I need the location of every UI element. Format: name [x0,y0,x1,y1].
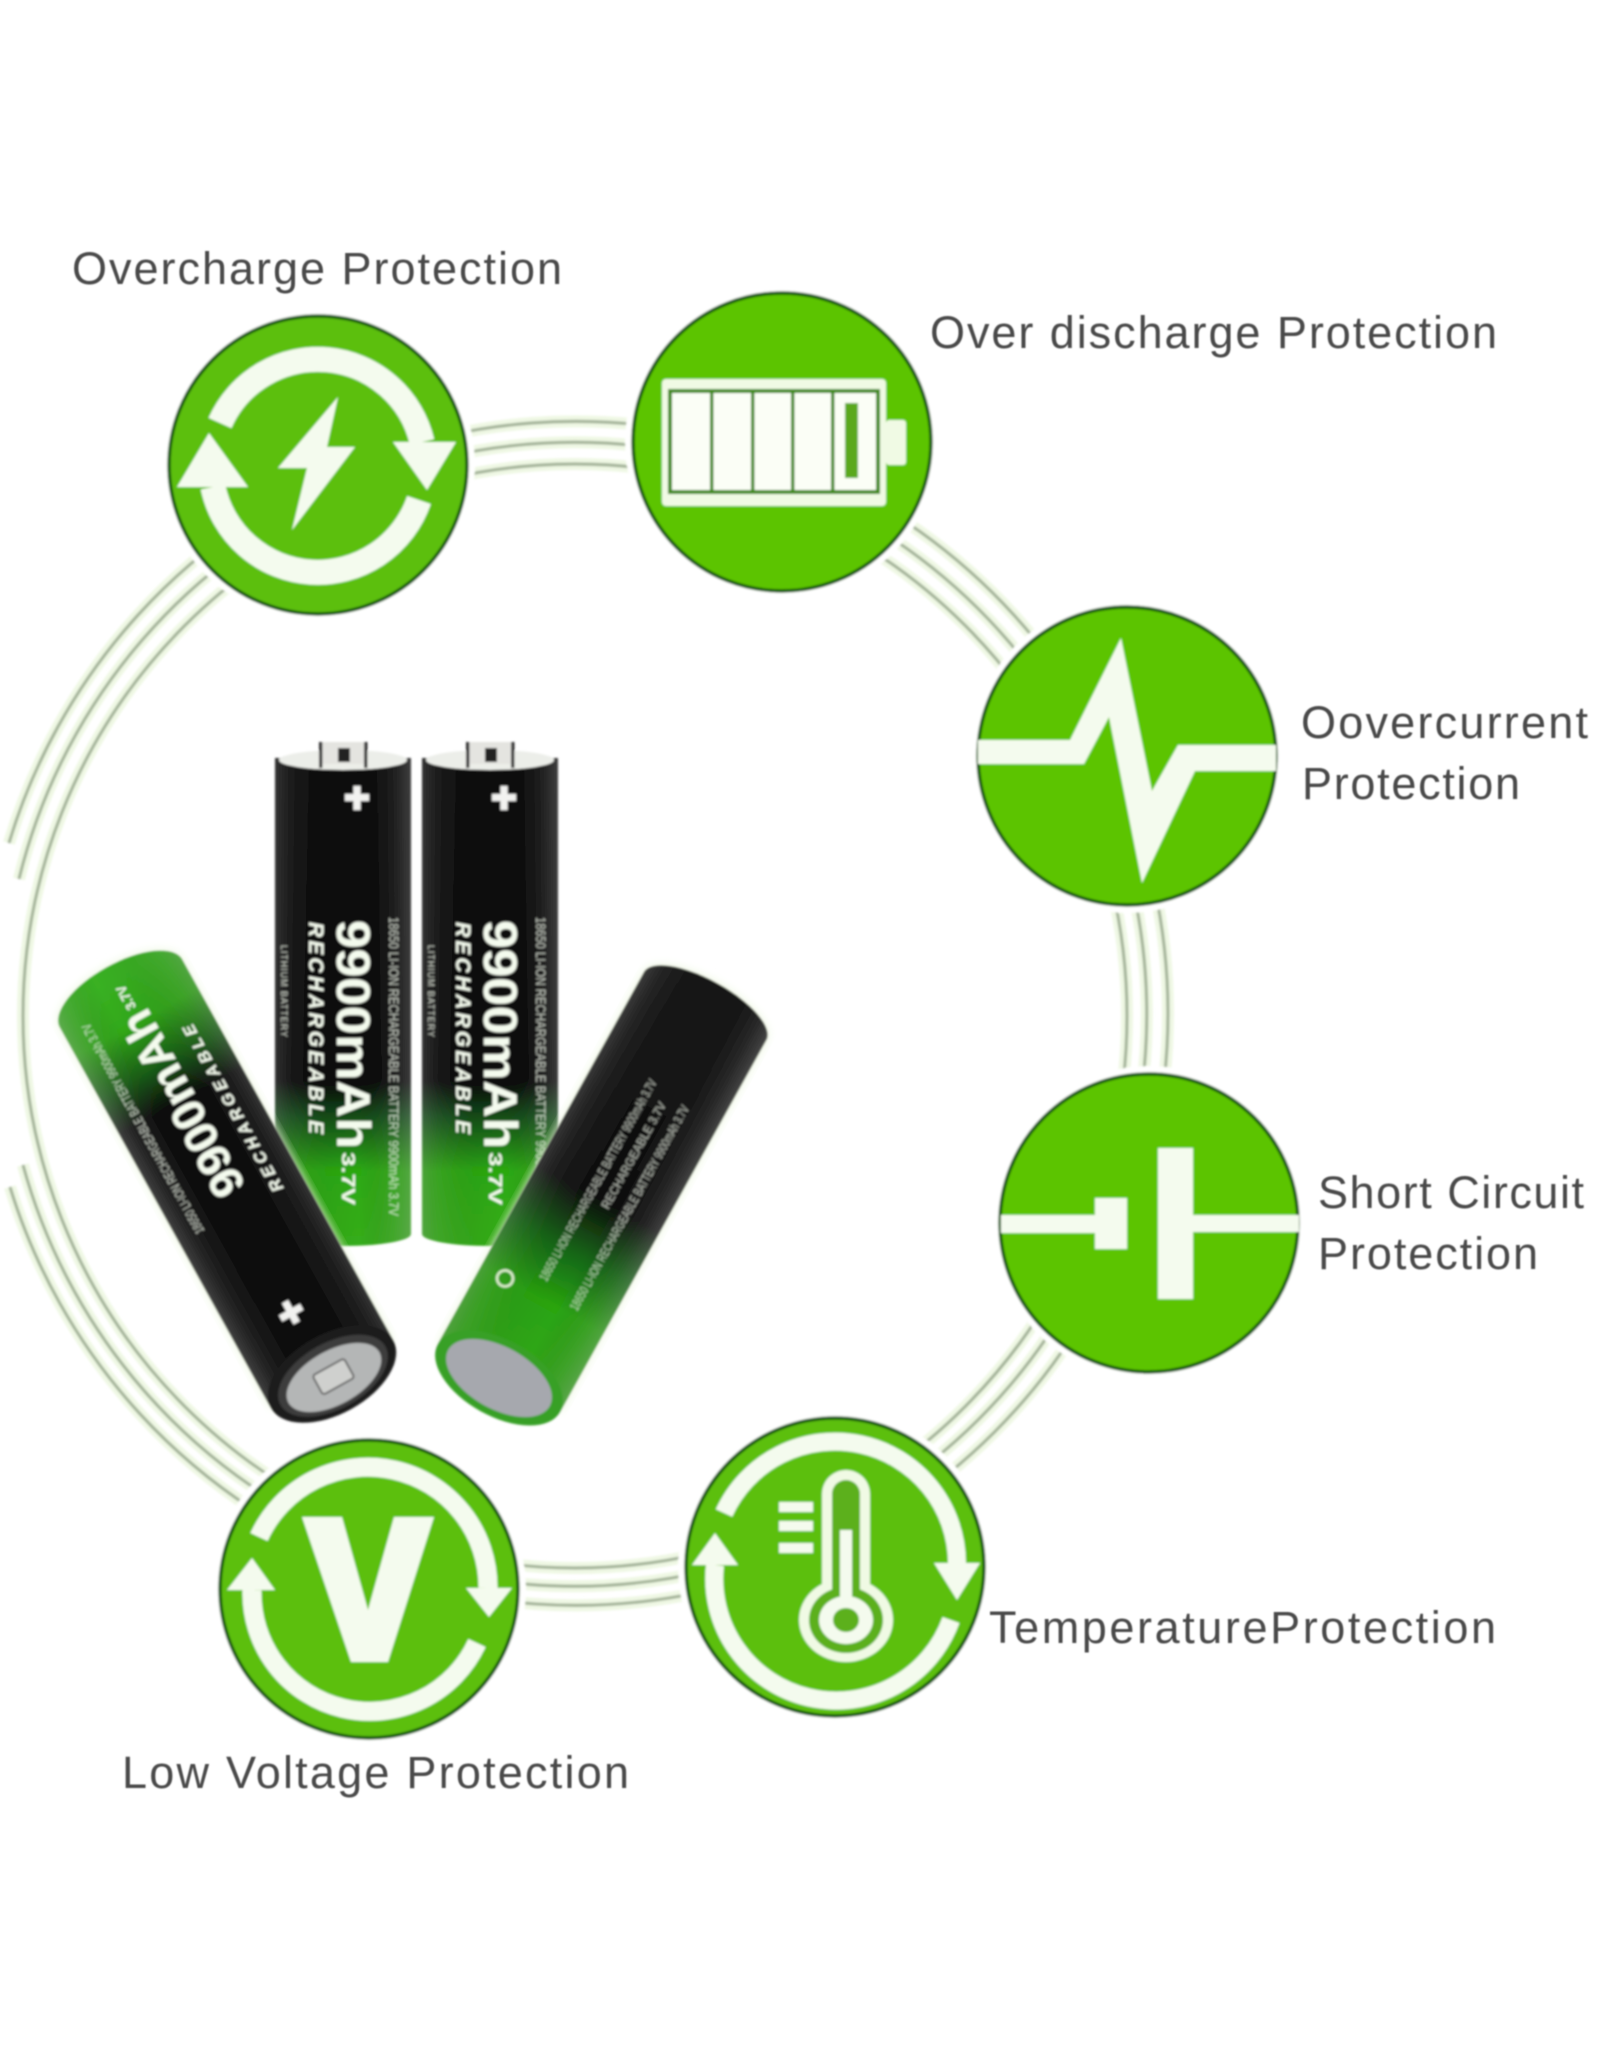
battery: upright left: LITHIUM BATTERY [279,945,289,1037]
panel: temperature protection icon [678,1410,992,1724]
battery: tilted right: 18650 LI-ION RECHARGEABLE BATTERY 9900mAh 3.7V [536,1077,660,1283]
battery: tilted right: RECHARGEABLE 3.7V [599,1100,669,1211]
battery: upright left: 9900mAh [327,920,380,1149]
panel: overcurrent protection icon [970,599,1284,913]
label: overcharge protection: Overcharge Protection [72,243,562,294]
battery: upright left: RECHARGEABLE [304,922,327,1135]
battery: upright right: LITHIUM BATTERY [426,945,436,1037]
battery: tilted left: RECHARGEABLE [179,1020,287,1195]
label: short circuit protection: Protection [1318,1228,1538,1279]
label: temperature protection: TemperatureProtection [989,1602,1496,1653]
battery: tilted left [45,933,413,1443]
battery: tilted left: 3.7V [112,982,139,1013]
battery: upright left: 3.7V [338,1152,358,1205]
label: short circuit protection: Short Circuit [1318,1167,1584,1218]
label: overcurrent protection: Oovercurrent [1301,697,1588,748]
battery: tilted right [419,950,779,1445]
battery: upright right: 9900mAh [474,920,527,1149]
battery: upright right: RECHARGEABLE [451,922,474,1135]
label: low voltage protection: Low Voltage Protection [122,1747,629,1798]
battery: tilted right: 18650 LI-ION RECHARGEABLE BATTERY 9900mAh 3.7V [567,1103,692,1313]
battery: tilted left: 9900mAh [110,1001,255,1206]
label: over discharge protection: Over discharge Protection [930,307,1497,358]
battery: upright left: 18650 LI-ION RECHARGEABLE BATTERY 9900mAh 3.7V [386,917,402,1217]
panel: low voltage protection icon [212,1432,526,1746]
panel: overcharge protection icon [161,308,475,622]
battery: upright right [422,742,558,1246]
battery: upright right: 3.7V [485,1152,505,1205]
battery: upright left [275,742,411,1246]
connecting rings [9,421,1168,1605]
battery: tilted left: 18650 LI-ION RECHARGEABLE BATTERY 9900mAh 3.7V [79,1021,207,1237]
battery: upright right: 18650 LI-ION RECHARGEABLE BATTERY 9900mAh 3.7V [533,917,549,1217]
panel: over discharge protection icon [625,285,939,599]
panel: short circuit protection icon [992,1066,1306,1380]
label: overcurrent protection: Protection [1302,758,1520,809]
